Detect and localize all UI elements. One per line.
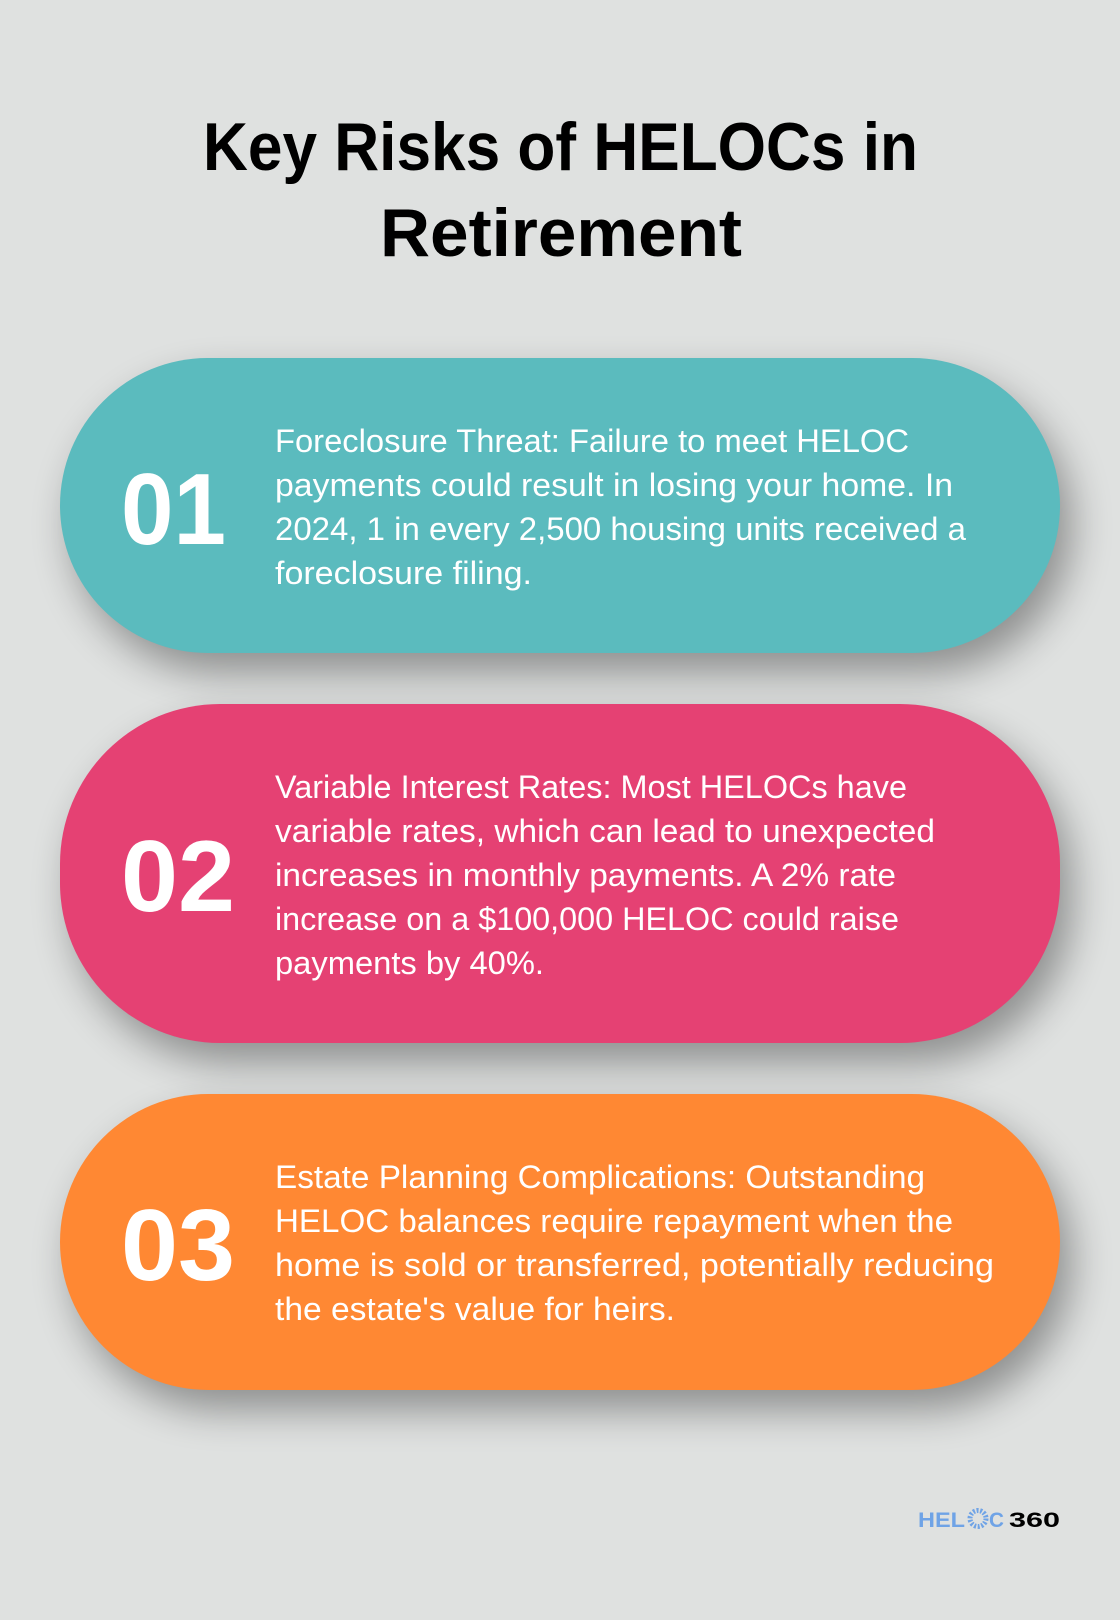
logo: HELOC360 (918, 1509, 1060, 1532)
description: estate planning complications: HELOC balances require repayment when the (275, 1203, 953, 1239)
description: variable interest rates: increases in monthly payments. A 2% rate (275, 857, 896, 893)
logo: HELOC360: HEL (918, 1509, 965, 1532)
description: estate planning complications: home is sold or transferred, potentially reducing (275, 1247, 994, 1283)
panel: foreclosure threat (60, 358, 1072, 673)
description: foreclosure threat: payments could result in losing your home. In (275, 467, 953, 503)
title (203, 109, 918, 271)
description: variable interest rates: increase on a $100,000 HELOC could raise (275, 901, 899, 937)
description: estate planning complications: Estate Planning Complications: Outstanding (275, 1159, 925, 1195)
description: foreclosure threat: foreclosure filing. (275, 555, 532, 591)
description: variable interest rates (275, 769, 935, 981)
number 02: 02 (121, 821, 235, 933)
description: foreclosure threat: Foreclosure Threat: Failure to meet HELOC (275, 423, 909, 459)
description: estate planning complications (275, 1159, 994, 1327)
number 01: 01 (121, 454, 226, 566)
description: foreclosure threat (275, 423, 966, 591)
description: variable interest rates: payments by 40%. (275, 945, 544, 981)
description: foreclosure threat: 2024, 1 in every 2,500 housing units received a (275, 511, 966, 547)
logo: HELOC360: 360 (1009, 1509, 1060, 1532)
title: Key Risks of HELOCs in (203, 109, 918, 185)
panel: estate planning complications (60, 1094, 1072, 1410)
number 03: 03 (121, 1190, 235, 1302)
description: estate planning complications: the estate's value for heirs. (275, 1291, 675, 1327)
description: variable interest rates: Variable Interest Rates: Most HELOCs have (275, 769, 907, 805)
panel: variable interest rates (60, 704, 1072, 1063)
description: variable interest rates: variable rates, which can lead to unexpected (275, 813, 935, 849)
title: Retirement (380, 195, 742, 271)
logo: HELOC360: C (989, 1509, 1004, 1532)
